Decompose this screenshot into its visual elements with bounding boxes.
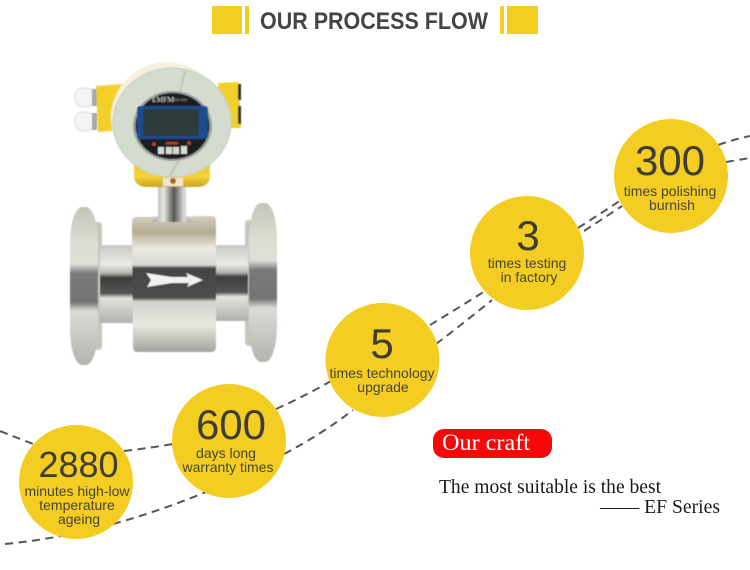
head halo bbox=[111, 62, 223, 174]
description: minutes high-low bbox=[24, 483, 130, 499]
header ornament right bbox=[500, 6, 538, 34]
description: ageing bbox=[58, 511, 100, 527]
EMFM logo text: EMFM bbox=[152, 95, 174, 104]
direction arrow bbox=[146, 273, 203, 287]
number: 300 bbox=[635, 137, 705, 184]
description: times polishing bbox=[624, 183, 716, 199]
meter body bbox=[132, 216, 216, 352]
slogan: The most suitable is the best bbox=[439, 477, 662, 498]
left pipe bbox=[100, 245, 133, 323]
step 1: 2880 bbox=[19, 425, 133, 539]
circle bbox=[614, 119, 728, 233]
step 4: 3 bbox=[470, 196, 584, 310]
number: 3 bbox=[516, 212, 540, 259]
circle bbox=[326, 303, 440, 417]
indicator lights bbox=[152, 141, 191, 146]
circle bbox=[19, 425, 133, 539]
circle bbox=[470, 196, 584, 310]
circle bbox=[172, 384, 286, 498]
LCD screen bbox=[143, 109, 199, 136]
description: times testing bbox=[488, 255, 566, 271]
cable gland top bbox=[75, 88, 97, 107]
yellow junction left bbox=[96, 84, 125, 132]
description: days long bbox=[196, 445, 256, 461]
attribution: —— EF Series bbox=[599, 497, 720, 518]
head cover bbox=[113, 68, 231, 177]
neck label bbox=[163, 178, 183, 186]
number: 600 bbox=[196, 401, 266, 448]
model text: EFD-1XX bbox=[172, 98, 188, 102]
badge: our craft bbox=[433, 429, 552, 458]
badge pill bbox=[433, 429, 552, 458]
description: upgrade bbox=[357, 379, 409, 395]
header ornament left bbox=[212, 6, 249, 34]
dashed flow curves bbox=[0, 136, 750, 544]
number: 2880 bbox=[38, 444, 119, 485]
badge text: Our craft bbox=[442, 430, 531, 455]
description: times technology bbox=[329, 365, 435, 381]
description: temperature bbox=[39, 497, 115, 513]
cable gland bottom bbox=[75, 112, 97, 131]
display bezel bbox=[133, 91, 212, 161]
LCD frame bbox=[137, 106, 208, 139]
step 3: 5 bbox=[326, 303, 440, 417]
yellow junction right bbox=[218, 82, 241, 128]
yellow neck bbox=[134, 160, 210, 187]
stem bbox=[152, 178, 192, 222]
right pipe bbox=[215, 245, 248, 321]
title: OUR PROCESS FLOW bbox=[260, 8, 489, 35]
description: burnish bbox=[649, 197, 695, 213]
right flange bbox=[245, 203, 277, 362]
heading: our process flow bbox=[212, 6, 538, 35]
number: 5 bbox=[370, 320, 394, 367]
keypad buttons bbox=[158, 146, 187, 154]
product photo: electromagnetic flow meter bbox=[70, 62, 277, 365]
description: in factory bbox=[501, 269, 557, 285]
description: warranty times bbox=[181, 459, 274, 475]
left flange bbox=[70, 207, 102, 365]
display face bbox=[136, 93, 210, 159]
step 2: 600 bbox=[172, 384, 286, 498]
step 5: 300 bbox=[614, 119, 728, 233]
head seam bbox=[170, 71, 185, 176]
